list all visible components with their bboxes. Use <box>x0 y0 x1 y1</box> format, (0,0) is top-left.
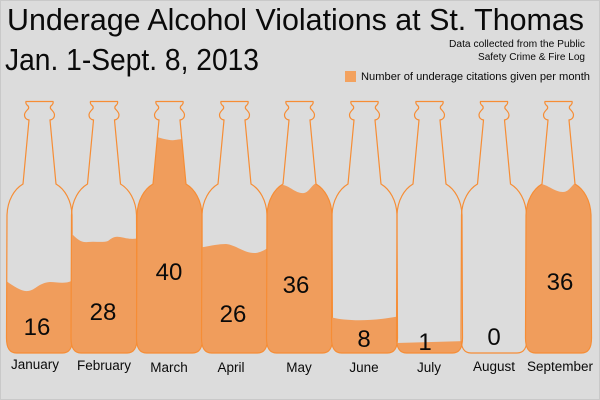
bottle: January: January <box>11 357 59 372</box>
bottle: April <box>198 102 272 375</box>
bottle: May <box>266 100 333 375</box>
bottle: July: 1 <box>418 329 432 356</box>
bottle: August <box>461 102 527 374</box>
bottle: June: 8 <box>357 326 371 353</box>
bottle: June <box>330 102 400 375</box>
title <box>5 2 584 77</box>
bottle: September <box>524 100 593 374</box>
bottle: February: February <box>77 358 131 373</box>
legend: Number of underage citations given per month <box>361 71 590 83</box>
bottle: August: 0 <box>487 324 501 351</box>
bottle: January: 16 <box>24 314 50 341</box>
source note: Safety Crime & Fire Log <box>478 52 585 63</box>
bottle: February: 28 <box>90 299 116 326</box>
bottle: March <box>136 100 203 372</box>
bottle: March: March <box>150 360 188 375</box>
bottle: April: April <box>217 360 245 375</box>
bottle: September: 36 <box>547 269 573 296</box>
bottle: April: 26 <box>220 301 246 328</box>
bottle: May: 36 <box>283 272 309 299</box>
bottle: September: September <box>527 359 594 374</box>
bottle: January <box>0 102 75 372</box>
source note: Data collected from the Public <box>449 39 585 50</box>
bottle: February <box>68 102 140 373</box>
bottle: July <box>395 102 465 375</box>
bottle: March: 40 <box>156 259 182 286</box>
source note <box>449 39 585 63</box>
bottle: August: August <box>473 359 515 374</box>
bottle: June: June <box>349 360 379 375</box>
title: Jan. 1-Sept. 8, 2013 <box>5 42 259 77</box>
bottle: July: July <box>417 360 441 375</box>
title: Underage Alcohol Violations at St. Thomas <box>7 2 584 37</box>
bottle: May: May <box>286 360 312 375</box>
